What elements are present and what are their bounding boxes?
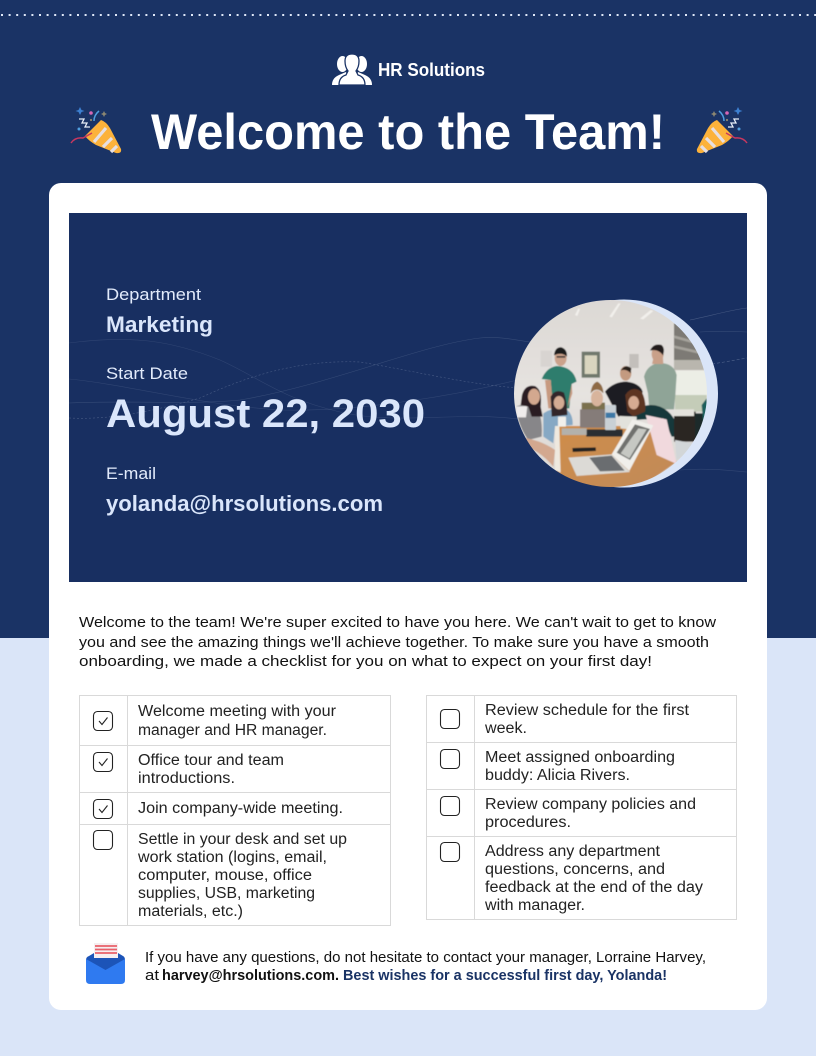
intro paragraph: you and see the amazing things we'll achieve together. To make sure you have a smooth	[79, 634, 709, 651]
front laptop	[612, 419, 653, 471]
closing message: at	[145, 968, 159, 984]
photo: team around a table	[510, 297, 727, 493]
item: review schedule: Review schedule for the first	[485, 702, 690, 719]
item: settle in desk: computer, mouse, office	[138, 867, 312, 884]
intro paragraph: onboarding, we made a checklist for you on what to expect on your first day!	[79, 653, 652, 670]
item: onboarding buddy	[440, 749, 675, 784]
item: department questions: with manager.	[484, 897, 585, 914]
closing message: Best wishes for a successful first day, Yolanda!	[343, 968, 667, 984]
item: settle in desk: supplies, USB, marketing	[138, 885, 315, 902]
item: department questions: feedback at the end of the day	[485, 879, 703, 896]
label: department: Department	[106, 285, 201, 304]
back laptop	[580, 409, 605, 428]
item: office tour (checked): Office tour and team	[138, 752, 284, 769]
table	[555, 426, 677, 493]
item: department questions: Address any department	[485, 843, 661, 860]
front: woman center bun	[582, 403, 605, 412]
item: review schedule	[440, 702, 690, 737]
water bottle	[605, 405, 616, 430]
closing message: If you have any questions, do not hesitate to contact your manager, Lorraine Harvey,	[145, 950, 706, 966]
item: welcome meeting (checked): manager and HR manager.	[138, 722, 327, 739]
label: e-mail: E-mail	[106, 464, 156, 483]
phone	[572, 447, 596, 452]
front: woman blue shirt	[543, 408, 573, 443]
icon: party popper left	[71, 107, 121, 153]
back: man left	[542, 366, 577, 408]
checklist: left table	[80, 696, 390, 926]
title: Welcome to the Team!	[151, 104, 665, 160]
checklist: right table	[426, 696, 736, 920]
item: department questions	[440, 842, 703, 914]
item: onboarding buddy: buddy: Alicia Rivers.	[485, 767, 630, 784]
back: woman center	[605, 382, 643, 417]
value: start date: August 22, 2030	[106, 392, 425, 436]
background: pale blue bottom band	[0, 638, 816, 1056]
label: start date: Start Date	[106, 364, 188, 383]
item: settle in desk	[94, 830, 347, 920]
logo: HR Solutions	[332, 54, 485, 85]
item: company policies: Review company policies and	[485, 796, 696, 813]
panel: white card	[49, 183, 767, 1010]
papers	[619, 416, 637, 430]
icon: party popper right	[697, 107, 747, 153]
background: navy top band	[0, 0, 816, 638]
value: e-mail address: yolanda@hrsolutions.com	[106, 491, 383, 516]
cup	[558, 417, 566, 427]
item: settle in desk: materials, etc.)	[138, 903, 243, 920]
item: company policies: procedures.	[485, 814, 571, 831]
item: office tour (checked)	[94, 752, 284, 787]
back: man right	[644, 363, 677, 409]
item: settle in desk: work station (logins, email,	[137, 849, 327, 866]
item: welcome meeting (checked)	[94, 703, 336, 739]
panel: new hire details	[69, 213, 747, 582]
item: company meeting (checked): Join company-wide meeting.	[138, 800, 343, 817]
intro paragraph	[79, 614, 716, 670]
item: office tour (checked): introductions.	[138, 770, 235, 787]
item: department questions: questions, concerns, and	[485, 861, 665, 878]
right chairs	[674, 412, 696, 442]
front: woman far left	[516, 404, 542, 440]
item: review schedule: week.	[484, 720, 527, 737]
item: welcome meeting (checked): Welcome meeting with your	[138, 703, 336, 720]
closing message	[145, 950, 706, 984]
icon: three people	[332, 54, 372, 85]
brand name: HR Solutions	[378, 59, 485, 80]
item: company policies	[440, 796, 696, 831]
item: onboarding buddy: Meet assigned onboarding	[485, 749, 675, 766]
pink laptop	[646, 415, 677, 464]
front: woman right leaning	[635, 404, 675, 438]
item: settle in desk: Settle in your desk and set up	[138, 831, 347, 848]
closing message: harvey@hrsolutions.com.	[162, 968, 339, 984]
value: marketing: Marketing	[106, 312, 213, 337]
icon: open envelope with letter	[86, 943, 125, 984]
intro paragraph: Welcome to the team! We're super excited to have you here. We can't wait to get to know	[79, 614, 716, 631]
